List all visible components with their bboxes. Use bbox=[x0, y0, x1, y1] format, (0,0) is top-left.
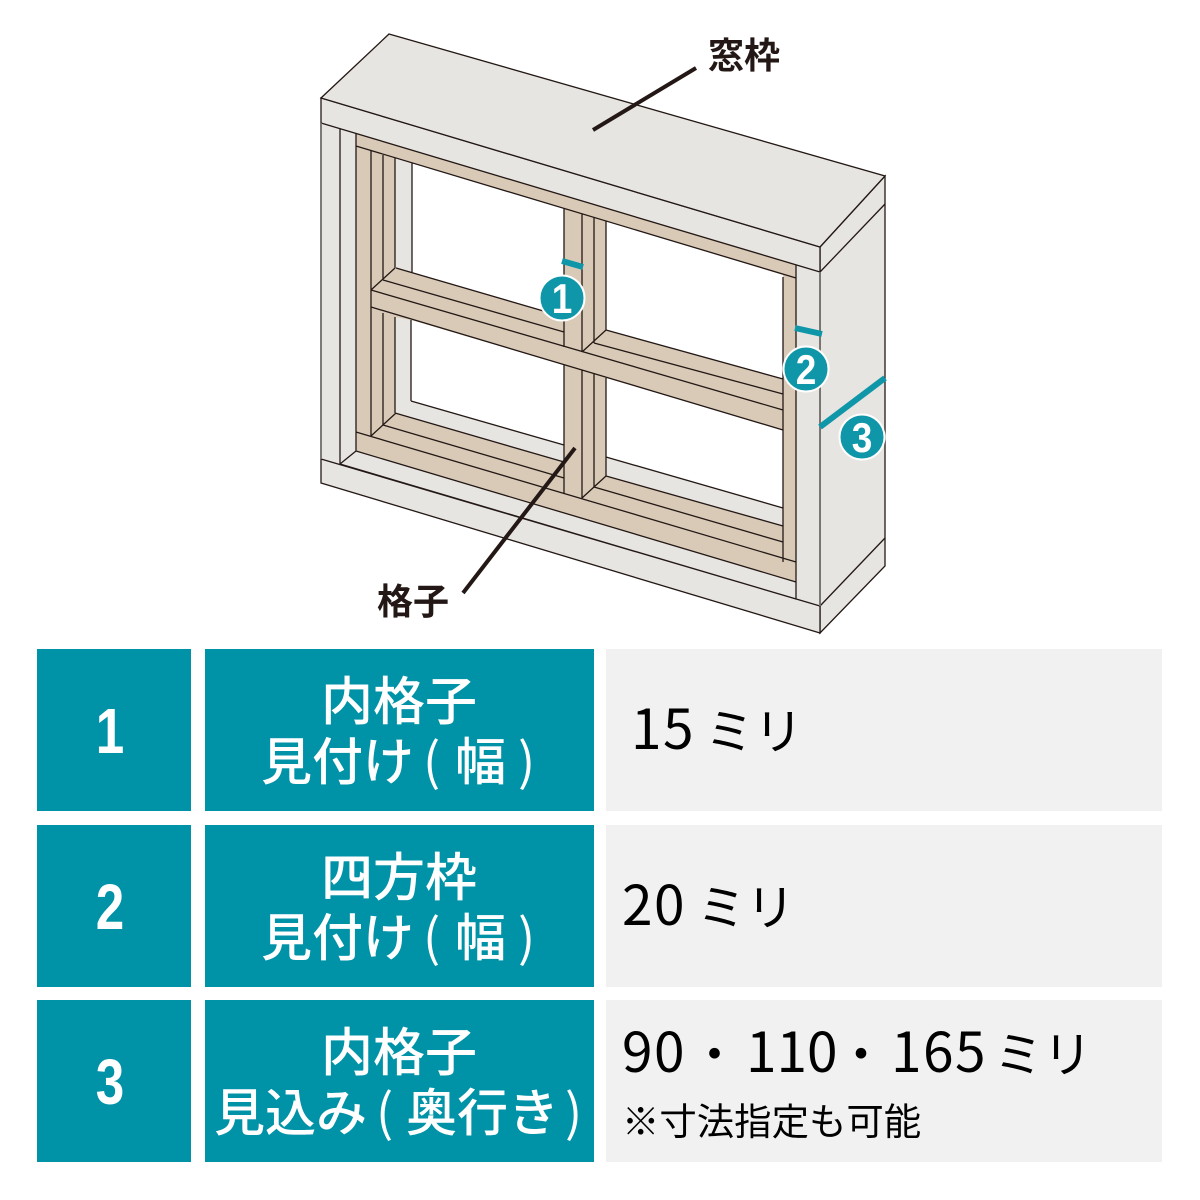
marker 2: 2 bbox=[796, 347, 816, 394]
window frame right side face bbox=[820, 176, 885, 633]
value cell 1 bbox=[606, 649, 1162, 811]
value cell 3: 90 bbox=[622, 1008, 686, 1088]
label: window frame: 窓枠 bbox=[708, 27, 780, 79]
note: ※寸法指定も可能 bbox=[622, 1092, 921, 1146]
value cell 3: ミリ bbox=[994, 1016, 1092, 1087]
value cell 3: 165 bbox=[891, 1008, 987, 1088]
marker 2 bbox=[784, 328, 828, 394]
heading cell 3: ( bbox=[376, 1072, 393, 1146]
number cell 3: 3 bbox=[96, 1048, 124, 1118]
heading cell 1 bbox=[205, 649, 594, 811]
heading cell 2: 幅 bbox=[455, 897, 506, 971]
heading cell 3: 見込み bbox=[214, 1072, 367, 1146]
leader line: lattice bbox=[463, 448, 575, 593]
marker 3 bbox=[820, 378, 885, 462]
table row 1 bbox=[37, 649, 1162, 811]
glass opening lower right bbox=[606, 378, 783, 508]
heading cell 1: 幅 bbox=[455, 721, 506, 795]
frame and lattice outlines bbox=[321, 123, 885, 606]
glass opening lower left bbox=[411, 320, 564, 445]
window frame front face bbox=[321, 98, 820, 633]
heading cell 3: ) bbox=[565, 1072, 582, 1146]
value cell 2 bbox=[606, 825, 1162, 987]
number cell 1: 1 bbox=[96, 697, 124, 767]
table row 3 bbox=[37, 1000, 1162, 1162]
leader line: window frame bbox=[593, 68, 696, 130]
heading cell 3: 内格子 bbox=[321, 1011, 477, 1086]
number cell 2 bbox=[37, 825, 191, 987]
value cell 2: 20 bbox=[622, 861, 686, 941]
heading cell 2 bbox=[205, 825, 594, 987]
value cell 1: 15 bbox=[631, 685, 695, 765]
heading cell 1: 内格子 bbox=[321, 660, 477, 735]
grey reveals and sills bbox=[395, 158, 783, 526]
heading cell 1: ) bbox=[518, 721, 535, 795]
heading cell 2: 見付け bbox=[261, 897, 414, 971]
softer grey vertical edges bbox=[321, 123, 820, 606]
value cell 3: ・ bbox=[690, 1015, 740, 1087]
heading cell 3 bbox=[205, 1000, 594, 1162]
window frame top face bbox=[321, 34, 885, 247]
glass opening upper left bbox=[412, 163, 564, 317]
value cell 3 bbox=[606, 1000, 1162, 1162]
label: lattice: 格子 bbox=[377, 573, 449, 625]
heading cell 3: 奥行き bbox=[406, 1072, 559, 1146]
marker 1 bbox=[540, 261, 584, 323]
glass opening upper right bbox=[606, 221, 783, 379]
marker 3: 3 bbox=[852, 415, 872, 462]
heading cell 2: ) bbox=[518, 897, 535, 971]
heading cell 2: 四方枠 bbox=[321, 836, 477, 911]
heading cell 1: 見付け bbox=[261, 721, 414, 795]
marker 1: 1 bbox=[552, 276, 572, 323]
heading cell 2: ( bbox=[423, 897, 440, 971]
table row 2 bbox=[37, 825, 1162, 987]
value cell 2: ミリ bbox=[697, 869, 795, 940]
value cell 1: ミリ bbox=[705, 693, 803, 764]
illustration: window frame with lattice bbox=[321, 34, 885, 633]
wooden lattice interior bbox=[356, 134, 796, 582]
number cell 2: 2 bbox=[96, 873, 124, 943]
number cell 1 bbox=[37, 649, 191, 811]
number cell 3 bbox=[37, 1000, 191, 1162]
value cell 3: 110 bbox=[746, 1008, 838, 1088]
value cell 3: ・ bbox=[836, 1015, 886, 1087]
heading cell 1: ( bbox=[423, 721, 440, 795]
